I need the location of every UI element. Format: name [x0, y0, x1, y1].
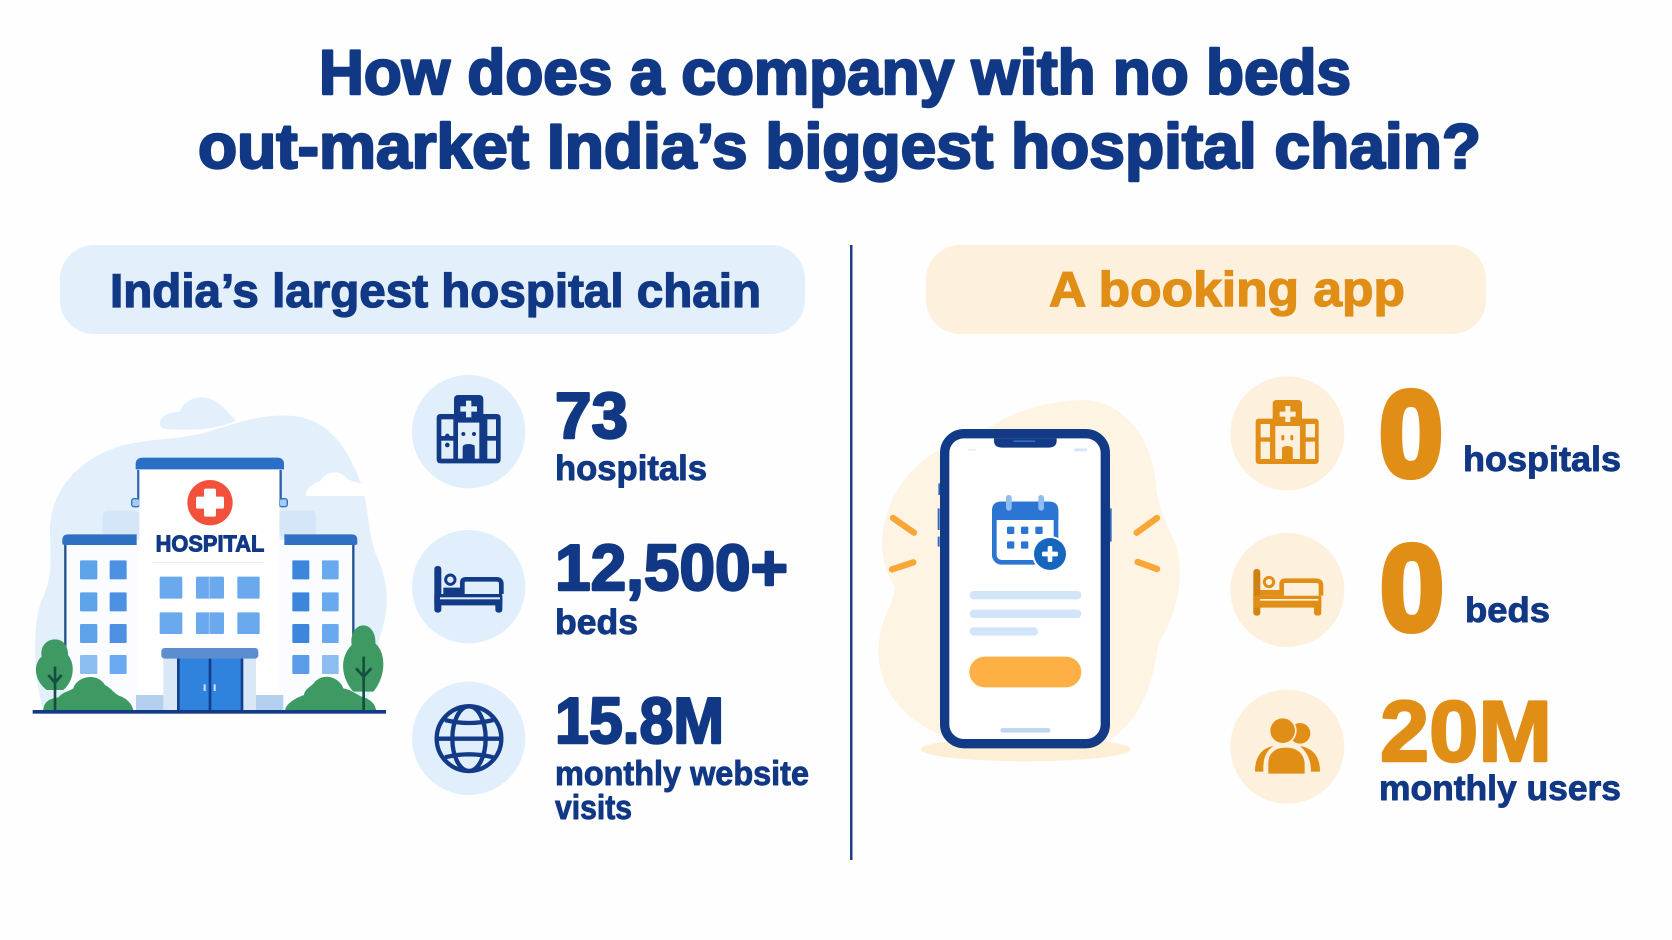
- panel: hospital chain heading: [60, 245, 805, 334]
- cloud top: [160, 398, 235, 430]
- caption: hospitals: [555, 449, 707, 488]
- icon: hospital: [412, 375, 525, 488]
- title: How does a company with no beds: [319, 38, 1351, 108]
- center divider: [850, 245, 852, 860]
- caption: monthly users: [1379, 769, 1621, 808]
- icon: bed: [1230, 533, 1344, 647]
- title: [198, 38, 1481, 182]
- illustration: phone with booking screen: [878, 400, 1180, 761]
- cloud right: [306, 472, 369, 496]
- stat: 0 beds: [1230, 520, 1550, 656]
- entrance: [161, 648, 258, 711]
- value: 0: [1379, 366, 1443, 502]
- stat: 73 hospitals: [412, 375, 707, 488]
- icon: calendar with plus: [992, 495, 1068, 572]
- caption: hospitals: [1463, 440, 1621, 479]
- red cross sign: [187, 480, 233, 525]
- building label: HOSPITAL: [156, 531, 264, 557]
- screen button: [969, 657, 1081, 687]
- stat: 15.8M monthly website visits: visits: [555, 789, 632, 827]
- stat: 12,500+ beds: [412, 530, 788, 643]
- icon: bed: [412, 530, 525, 643]
- trees and bushes: [36, 625, 383, 711]
- stat: 0 hospitals: [1230, 366, 1621, 502]
- value: 0: [1380, 520, 1444, 656]
- panel: booking app heading: [926, 245, 1486, 334]
- notification rays: [892, 518, 1157, 569]
- icon: users: [1230, 690, 1344, 804]
- icon: globe: [412, 682, 525, 795]
- value: 12,500+: [555, 531, 788, 604]
- caption: monthly website: [555, 755, 809, 793]
- stat: 20M monthly users: [1230, 684, 1621, 808]
- title: out-market India’s biggest hospital chain?: [198, 112, 1481, 182]
- value: 73: [555, 379, 628, 452]
- illustration: hospital building: [33, 398, 387, 714]
- screen text lines: [970, 591, 1081, 636]
- caption: beds: [555, 603, 638, 642]
- panel: hospital chain heading: India’s largest hospital chain: [110, 264, 761, 317]
- icon: hospital: [1230, 376, 1344, 490]
- stat: 15.8M monthly website visits: [412, 682, 809, 827]
- value: 20M: [1380, 684, 1552, 780]
- caption: beds: [1465, 591, 1550, 630]
- panel: booking app heading: A booking app: [1049, 263, 1405, 317]
- value: 15.8M: [555, 684, 724, 757]
